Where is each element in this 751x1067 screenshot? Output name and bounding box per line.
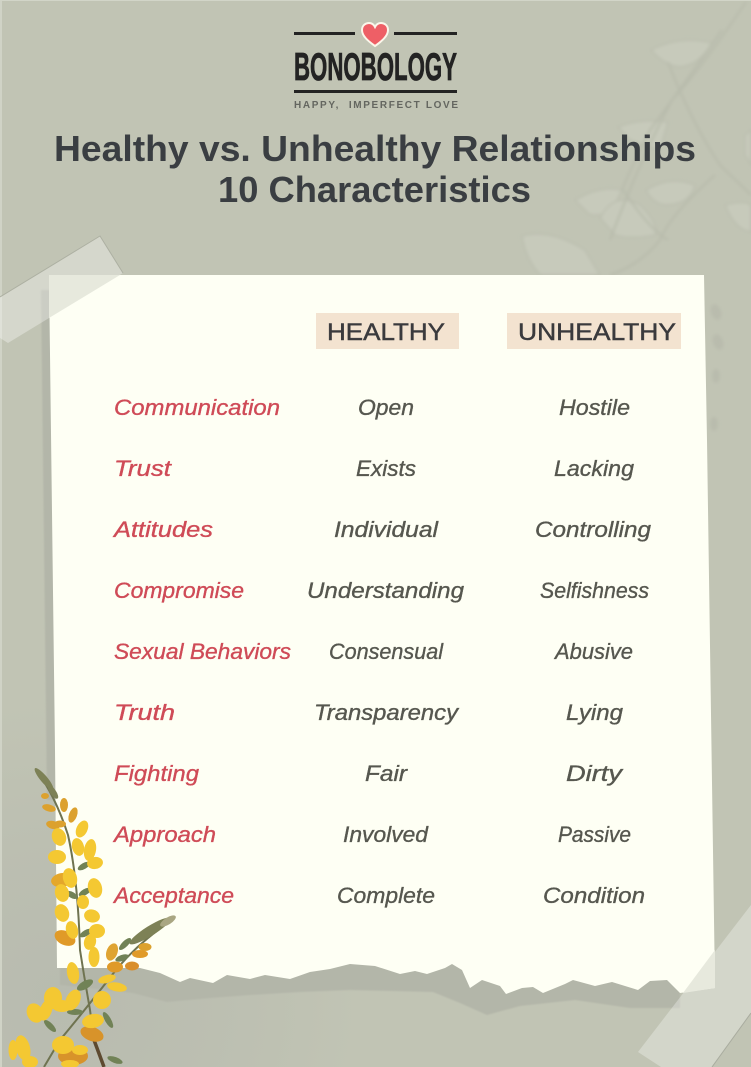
title [54,128,696,210]
row: truth: Truth [114,700,175,725]
logo: BONOBOLOGY [294,46,457,89]
column header: healthy [316,313,459,349]
tape: top left [0,236,123,343]
logo: HAPPY, IMPERFECT LOVE [294,100,458,111]
row: communication [114,395,630,420]
row: attitudes: Individual [334,517,439,542]
column header: unhealthy: UNHEALTHY [518,319,676,346]
row: sexual behaviors: Consensual [329,639,444,664]
ghost botanical branch [522,2,751,431]
column header: healthy: HEALTHY [327,319,445,346]
row: fighting: Dirty [566,761,624,786]
row: approach: Approach [112,822,216,847]
row: acceptance: Complete [337,883,435,908]
row: approach [112,822,631,847]
row: communication: Hostile [559,395,630,420]
row: trust: Trust [114,456,172,481]
row: fighting: Fair [365,761,409,786]
row: truth: Transparency [314,700,460,725]
row: sexual behaviors [114,639,633,664]
row: compromise: Understanding [307,578,465,603]
row: trust [114,456,635,481]
row: compromise: Compromise [114,578,244,603]
icon: heart [362,23,388,46]
row: fighting: Fighting [114,761,200,786]
row: approach: Passive [558,822,631,847]
row: compromise: Selfishness [540,578,649,603]
page top highlight [0,0,751,1]
tape: bottom right [638,905,751,1067]
row: truth [114,700,624,725]
row: compromise [114,578,649,603]
row: approach: Involved [343,822,429,847]
row: fighting [114,761,624,786]
title: 10 Characteristics [218,169,531,210]
row: communication: Communication [114,395,280,420]
row: acceptance: Acceptance [112,883,234,908]
icon: yellow flower branch [8,766,177,1067]
title: Healthy vs. Unhealthy Relationships [54,128,696,169]
row: truth: Lying [566,700,624,725]
row: trust: Lacking [554,456,635,481]
panel: torn paper [49,275,715,994]
row: attitudes: Attitudes [112,517,213,542]
row: communication: Open [358,395,414,420]
logo [294,23,458,111]
row: attitudes: Controlling [535,517,652,542]
row: trust: Exists [356,456,416,481]
column header: unhealthy [507,313,681,349]
row: sexual behaviors: Sexual Behaviors [114,639,291,664]
row: acceptance: Condition [543,883,645,908]
paper shadow [41,290,680,1015]
row: acceptance [112,883,645,908]
row: sexual behaviors: Abusive [553,639,633,664]
row: attitudes [112,517,652,542]
